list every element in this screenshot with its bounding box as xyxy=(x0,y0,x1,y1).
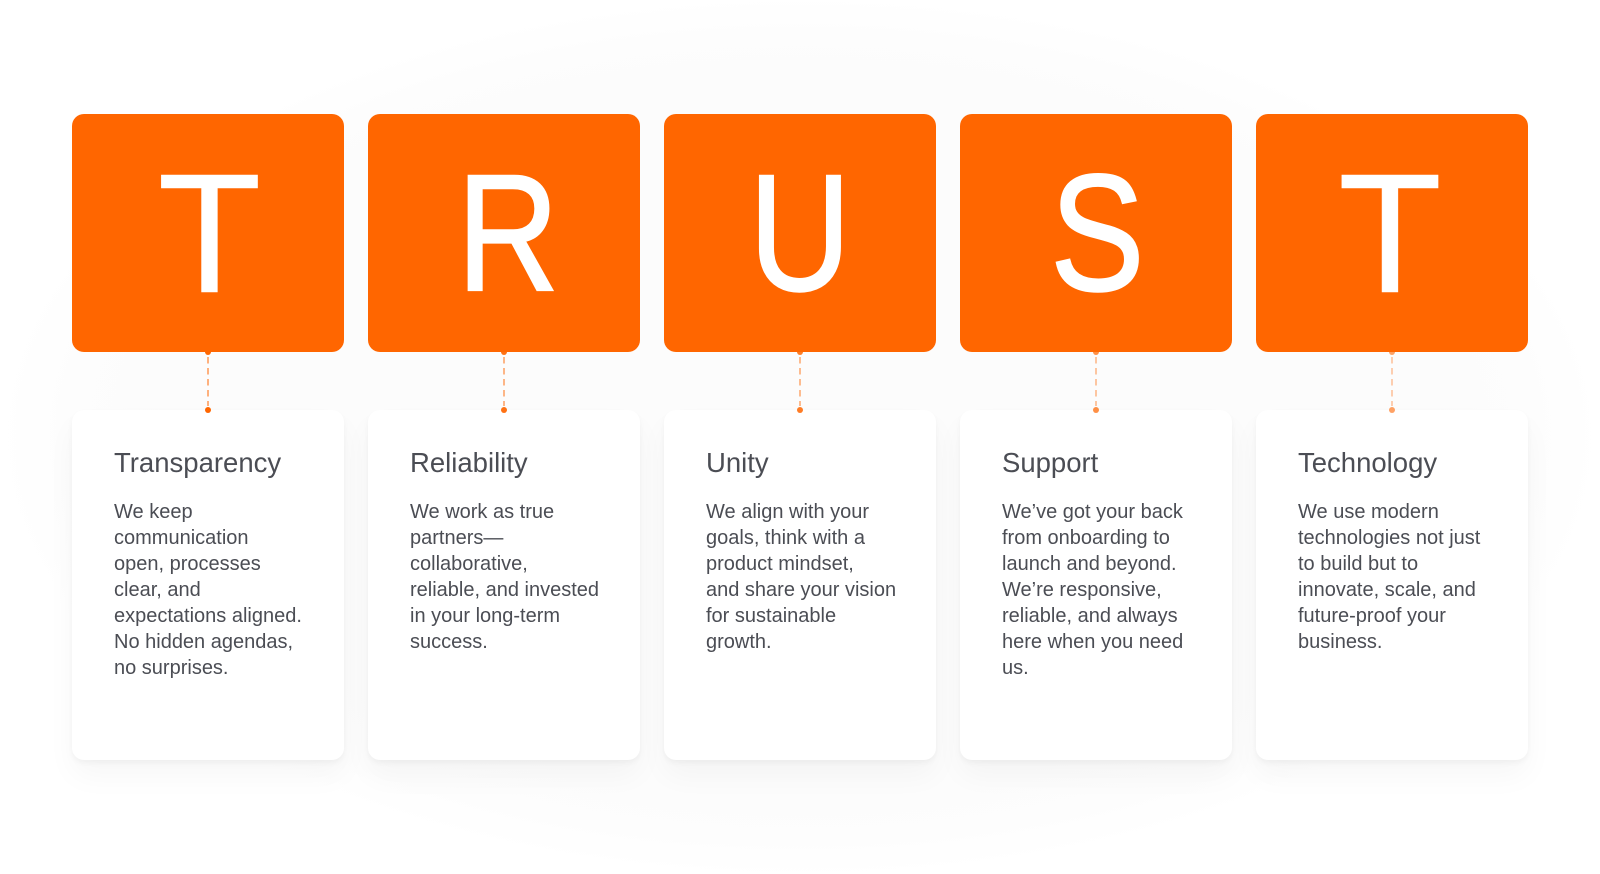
text: Reliability description: collaborative, xyxy=(410,553,528,575)
text: Unity description: We align with your xyxy=(706,501,869,523)
text: Reliability description: partners— xyxy=(410,527,503,549)
heading: Technology: Technology xyxy=(1298,447,1437,478)
text: Support description: We’ve got your back xyxy=(1002,501,1183,523)
text: Technology description: innovate, scale, and xyxy=(1298,579,1476,601)
text: Transparency description: open, processes xyxy=(114,553,261,575)
text: Reliability description: in your long-term xyxy=(410,605,560,627)
text: Reliability description: reliable, and invested xyxy=(410,579,599,601)
card: Technology xyxy=(1256,410,1528,760)
card: Transparency xyxy=(72,410,344,760)
heading: Support: Support xyxy=(1002,447,1098,478)
text: Support description: us. xyxy=(1002,657,1029,679)
card: Reliability xyxy=(368,410,640,760)
text: Technology description: technologies not just xyxy=(1298,527,1480,549)
text: Reliability description: success. xyxy=(410,631,488,653)
text: Support description: from onboarding to xyxy=(1002,527,1170,549)
card: Support xyxy=(960,410,1232,760)
text: Support description xyxy=(1002,501,1183,679)
text: Technology description xyxy=(1298,501,1480,653)
card: Unity xyxy=(664,410,936,760)
text: Support description: here when you need xyxy=(1002,631,1183,653)
letter tile: U xyxy=(664,114,936,352)
connector: T to Technology xyxy=(1389,352,1395,413)
text: Technology description: We use modern xyxy=(1298,501,1439,523)
text: Transparency description: No hidden agendas, xyxy=(114,631,293,653)
connector: U to Unity xyxy=(797,352,803,413)
text: Unity description xyxy=(706,501,896,653)
text: Technology description: future-proof your xyxy=(1298,605,1446,627)
heading: Unity: Unity xyxy=(706,447,769,478)
text: Unity description: growth. xyxy=(706,631,772,653)
letter tile: T xyxy=(1256,114,1528,352)
text: Transparency description: no surprises. xyxy=(114,657,228,679)
letter tile: S: S xyxy=(1050,141,1144,326)
connector: T to Transparency xyxy=(205,352,211,413)
text: Transparency description xyxy=(114,501,302,679)
letter tile: S xyxy=(960,114,1232,352)
letter tile: T: T xyxy=(158,139,261,329)
panel: Transparency column xyxy=(72,114,344,764)
heading: Reliability: Reliability xyxy=(410,447,528,478)
text: Support description: reliable, and always xyxy=(1002,605,1178,627)
letter tile: T: T xyxy=(1338,139,1442,329)
connector: S to Support xyxy=(1093,352,1099,413)
panel: Support column xyxy=(960,114,1232,764)
text: Technology description: business. xyxy=(1298,631,1382,653)
text: Transparency description: clear, and xyxy=(114,579,201,601)
text: Support description: launch and beyond. xyxy=(1002,553,1177,575)
text: Reliability description xyxy=(410,501,599,653)
text: Transparency description: expectations aligned. xyxy=(114,605,302,627)
text: Technology description: to build but to xyxy=(1298,553,1418,575)
panel: Technology column xyxy=(1256,114,1528,764)
text: Unity description: for sustainable xyxy=(706,605,836,627)
connector: R to Reliability xyxy=(501,352,507,413)
letter tile: R xyxy=(368,114,640,352)
letter tile: U: U xyxy=(749,141,851,326)
text: Transparency description: We keep xyxy=(114,501,193,523)
text: Unity description: and share your vision xyxy=(706,579,896,601)
text: Support description: We’re responsive, xyxy=(1002,579,1162,601)
heading: Transparency: Transparency xyxy=(114,447,281,478)
text: Transparency description: communication xyxy=(114,527,249,549)
text: Unity description: goals, think with a xyxy=(706,527,865,549)
text: Reliability description: We work as true xyxy=(410,501,554,523)
panel: Reliability column xyxy=(368,114,640,764)
panel: Unity column xyxy=(664,114,936,764)
text: Unity description: product mindset, xyxy=(706,553,854,575)
letter tile: T xyxy=(72,114,344,352)
letter tile: R: R xyxy=(457,141,559,326)
